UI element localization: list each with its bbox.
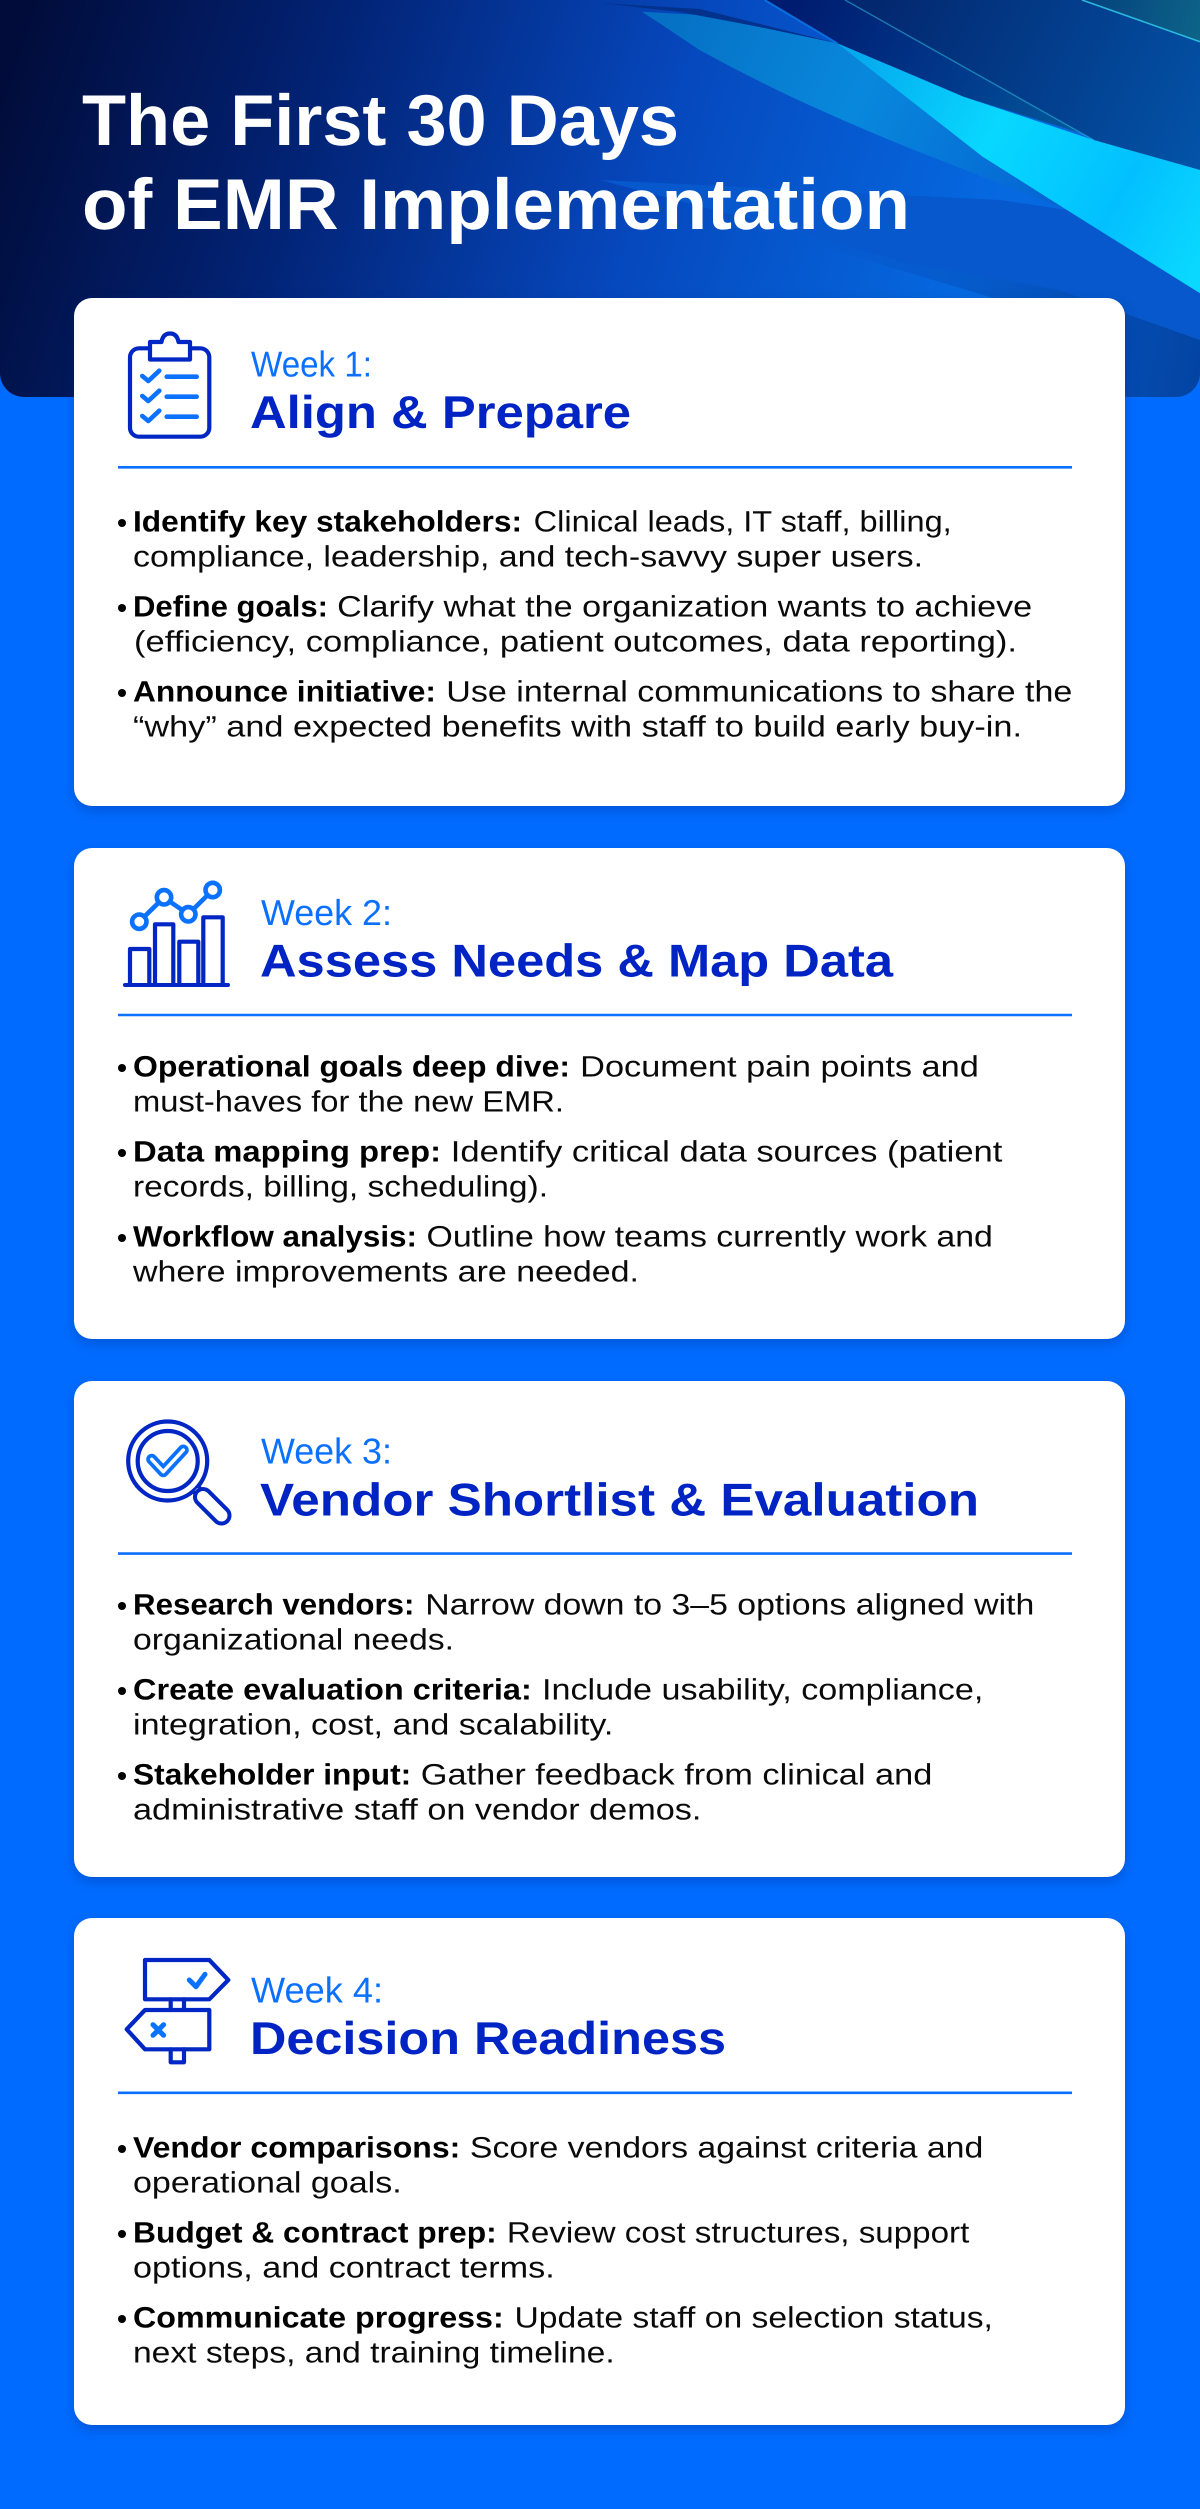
text block: week 3 bullets: Gather feedback from clinical and bbox=[421, 1758, 932, 1791]
text block: week 4 bullets: Update staff on selection status, bbox=[514, 2301, 993, 2334]
panel: week 2 bbox=[74, 848, 1125, 1339]
text block: week 1 bullets: Define goals: bbox=[133, 591, 328, 624]
text block: week 3 bullets bbox=[118, 1588, 1034, 1826]
icon: clipboard checklist bbox=[130, 334, 209, 437]
text block: week 1 bullets: “why” and expected benefits with staff to build early buy-in. bbox=[133, 711, 1022, 744]
text block: week 1 bullets: Clarify what the organization wants to achieve bbox=[337, 591, 1032, 624]
text block: week 1 bullets: compliance, leadership, and tech-savvy super users. bbox=[133, 541, 923, 574]
heading: week 4: Week 4: bbox=[251, 1969, 383, 2010]
text block: week 4 bullets bbox=[118, 2131, 993, 2369]
text block: week 4 bullets: Vendor comparisons: bbox=[133, 2131, 460, 2164]
header banner bbox=[0, 0, 1200, 397]
text block: week 4 bullets: Review cost structures, support bbox=[507, 2216, 969, 2249]
heading: week 1: Week 1: bbox=[251, 344, 372, 385]
text block: week 1 bullets: Use internal communications to share the bbox=[446, 676, 1072, 709]
heading: week 1: Align & Prepare bbox=[250, 386, 631, 438]
text block: week 3 bullets: Narrow down to 3–5 options aligned with bbox=[425, 1588, 1034, 1621]
text block: week 4 bullets: Score vendors against criteria and bbox=[470, 2131, 983, 2164]
heading: week 4: Decision Readiness bbox=[250, 2012, 726, 2064]
heading: week 1 bbox=[250, 344, 631, 438]
text block: week 3 bullets: Create evaluation criteria: bbox=[133, 1673, 532, 1706]
text block: week 3 bullets: Research vendors: bbox=[133, 1588, 414, 1621]
icon: direction signpost bbox=[127, 1960, 228, 2062]
text block: week 2 bullets: Identify critical data sources (patient bbox=[451, 1136, 1002, 1168]
text block: week 2 bullets: Operational goals deep dive: bbox=[133, 1050, 570, 1084]
panel: week 4 bbox=[74, 1918, 1125, 2425]
text block: week 4 bullets: Budget & contract prep: bbox=[133, 2216, 497, 2249]
text block: week 1 bullets: Announce initiative: bbox=[133, 676, 436, 709]
text block: week 2 bullets: Document pain points and bbox=[580, 1050, 979, 1084]
text block: week 1 bullets: (efficiency, compliance, patient outcomes, data reporting). bbox=[134, 626, 1017, 659]
text block: week 2 bullets: where improvements are needed. bbox=[132, 1256, 639, 1288]
text block: week 3 bullets: organizational needs. bbox=[133, 1623, 454, 1656]
heading: week 2: Week 2: bbox=[261, 892, 392, 933]
panel: week 1 bbox=[74, 298, 1125, 806]
text block: week 3 bullets: integration, cost, and scalability. bbox=[133, 1708, 613, 1741]
text block: week 2 bullets bbox=[118, 1050, 1002, 1288]
text block: week 2 bullets: must-haves for the new EMR. bbox=[133, 1086, 564, 1118]
text block: week 3 bullets: Stakeholder input: bbox=[133, 1758, 411, 1791]
text block: week 1 bullets: Clinical leads, IT staff, billing, bbox=[534, 506, 952, 539]
heading: week 2 bbox=[260, 892, 893, 987]
text block: week 2 bullets: Workflow analysis: bbox=[133, 1220, 417, 1254]
text block: week 3 bullets: Include usability, compliance, bbox=[542, 1673, 983, 1706]
panel: week 3 bbox=[74, 1381, 1125, 1877]
title bbox=[82, 81, 910, 245]
text block: week 3 bullets: administrative staff on vendor demos. bbox=[133, 1793, 701, 1826]
text block: week 4 bullets: options, and contract terms. bbox=[133, 2251, 555, 2284]
text block: week 4 bullets: operational goals. bbox=[133, 2166, 402, 2199]
text block: week 4 bullets: next steps, and training timeline. bbox=[133, 2336, 615, 2369]
title: The First 30 Days bbox=[82, 81, 679, 161]
text block: week 4 bullets: Communicate progress: bbox=[133, 2301, 504, 2334]
text block: week 2 bullets: records, billing, scheduling). bbox=[133, 1170, 548, 1204]
heading: week 2: Assess Needs & Map Data bbox=[260, 935, 893, 987]
icon: bar chart with trend line bbox=[125, 883, 228, 985]
icon: magnifying glass with check bbox=[128, 1422, 222, 1516]
title: of EMR Implementation bbox=[82, 165, 910, 245]
text block: week 2 bullets: Data mapping prep: bbox=[133, 1136, 441, 1168]
text block: week 2 bullets: Outline how teams currently work and bbox=[426, 1220, 993, 1254]
text block: week 1 bullets bbox=[118, 506, 1072, 744]
text block: week 1 bullets: Identify key stakeholders: bbox=[133, 506, 522, 539]
heading: week 3: Week 3: bbox=[261, 1430, 392, 1471]
heading: week 3 bbox=[260, 1430, 979, 1526]
heading: week 3: Vendor Shortlist & Evaluation bbox=[260, 1474, 979, 1526]
heading: week 4 bbox=[250, 1969, 726, 2064]
